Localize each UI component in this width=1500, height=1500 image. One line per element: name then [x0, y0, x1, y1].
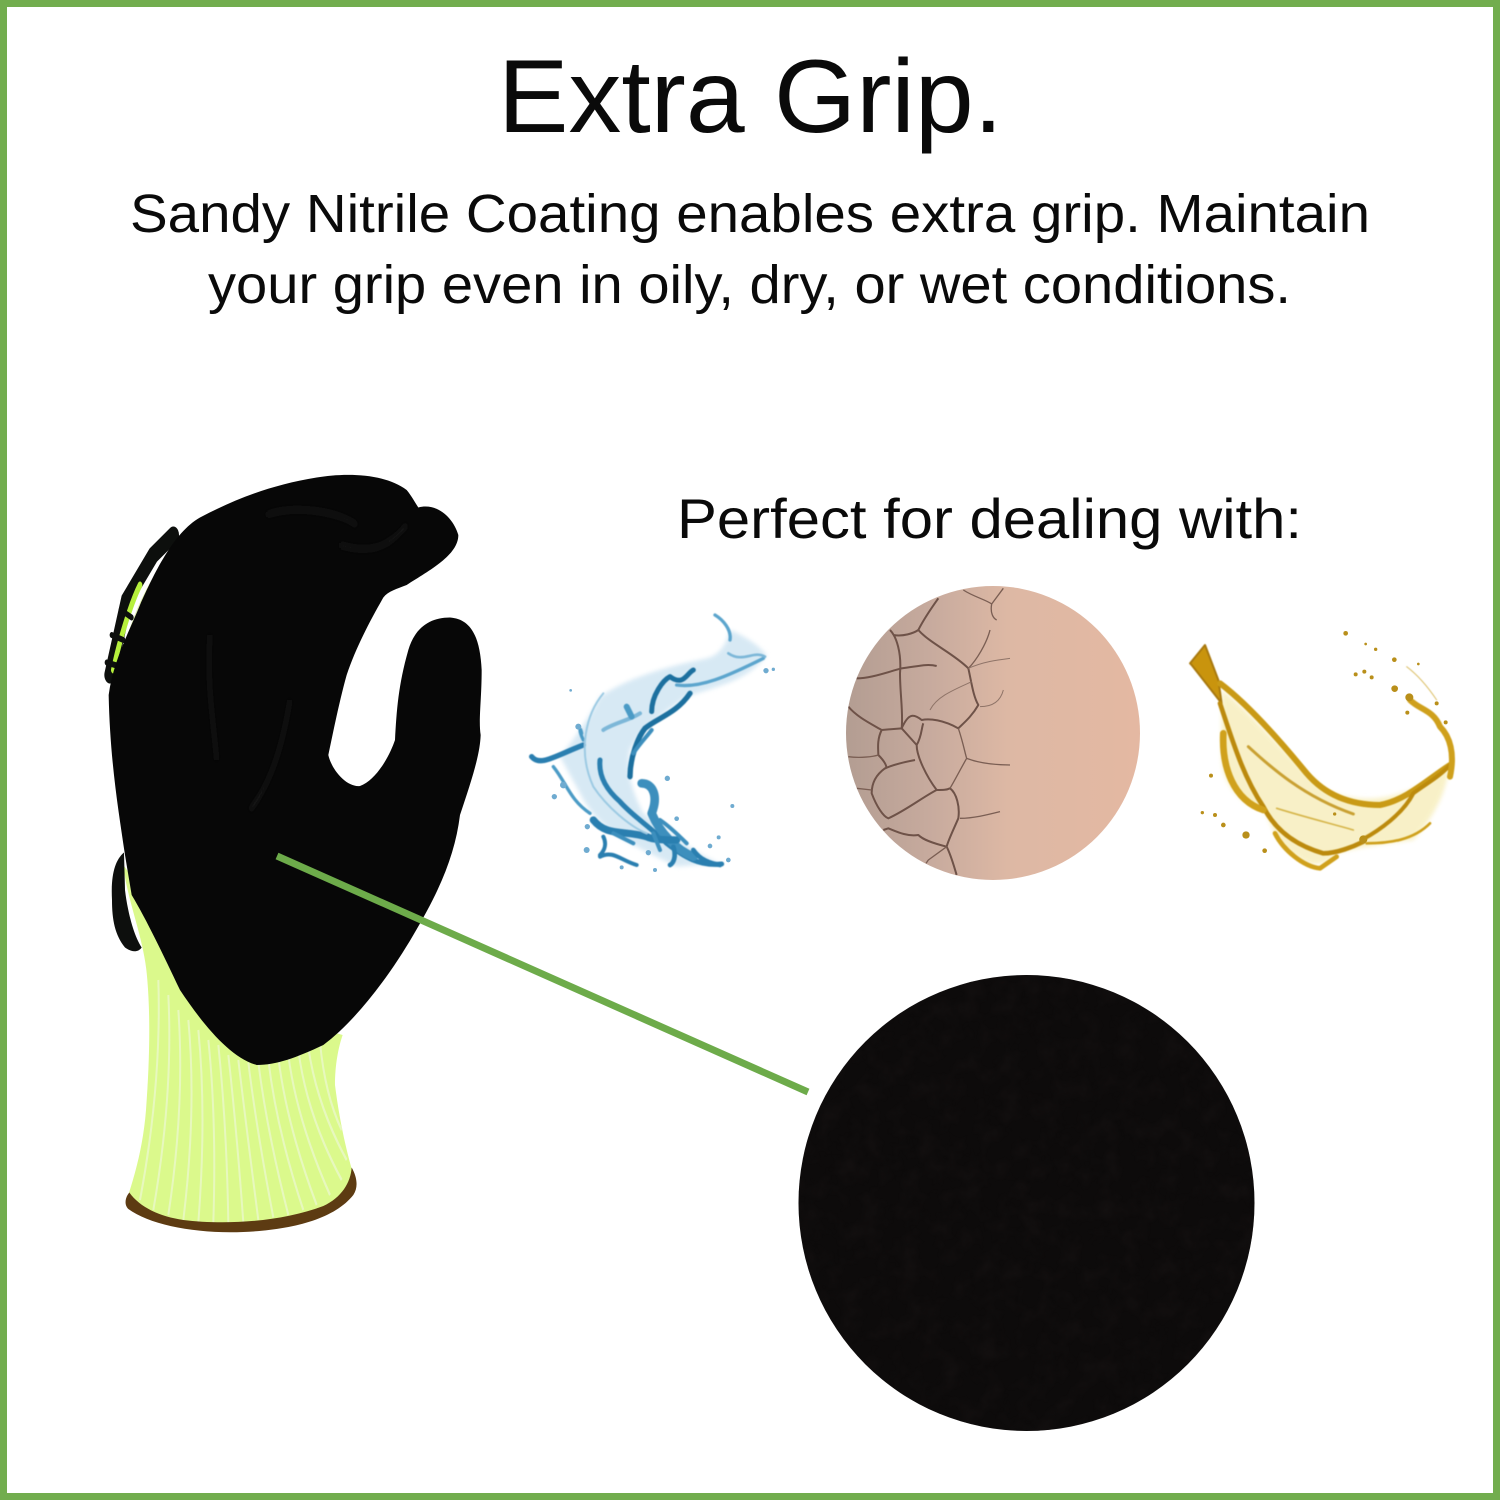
- description text: Sandy Nitrile Coating enables extra grip. Maintain: [130, 184, 1370, 244]
- water splash icon: [532, 615, 775, 872]
- description text: [130, 184, 1370, 315]
- pointer line: [277, 856, 808, 1092]
- glove cuff hem: [126, 1168, 357, 1232]
- glove wrist bumper: [112, 852, 142, 951]
- water droplets: [552, 668, 775, 872]
- skin cracks: [848, 588, 1010, 875]
- glove palm shading: [209, 510, 407, 810]
- oil splash icon: [1190, 631, 1452, 868]
- glove palm: [109, 475, 482, 1065]
- sandy nitrile texture close-up: [798, 975, 1254, 1431]
- water streaks: [532, 615, 765, 865]
- glove cuff: [123, 865, 357, 1228]
- dry skin circle: [846, 586, 1140, 880]
- oil droplets: [1201, 631, 1448, 853]
- oil streaks: [1190, 645, 1452, 868]
- oil body: [1222, 690, 1450, 864]
- subheading: Perfect for dealing with:: [677, 487, 1302, 550]
- glove illustration: [107, 475, 482, 1232]
- title: Extra Grip.: [498, 39, 1003, 155]
- description text: your grip even in oily, dry, or wet conditions.: [208, 255, 1291, 315]
- glove back highlights: [107, 535, 173, 675]
- water body: [560, 630, 767, 867]
